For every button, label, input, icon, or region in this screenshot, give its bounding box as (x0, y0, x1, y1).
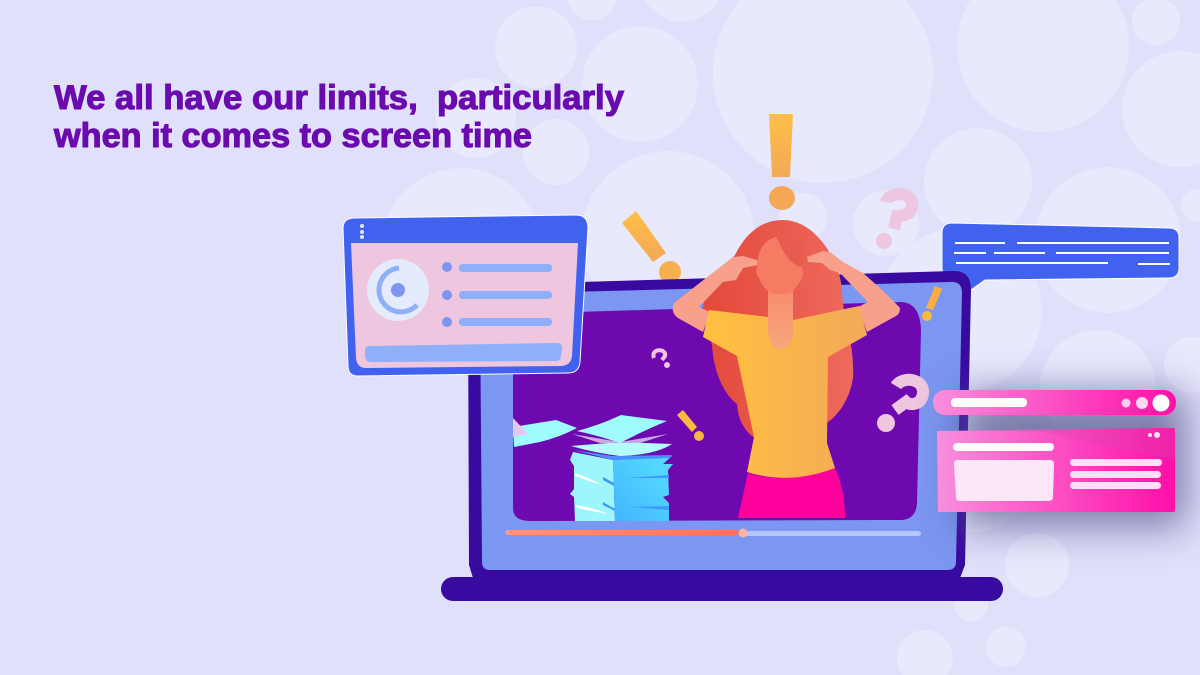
laptop base (441, 577, 1003, 601)
progress bar (505, 528, 921, 538)
title (53, 79, 624, 155)
video area (513, 302, 921, 521)
right arm (807, 251, 900, 332)
panel: dashboard window (343, 215, 588, 376)
flying sheet (513, 418, 577, 447)
small exclamation mark (677, 410, 704, 441)
woman (673, 220, 900, 518)
paper stack (513, 415, 673, 521)
list rows (442, 262, 552, 327)
laptop lid (468, 271, 971, 578)
window frame (343, 215, 588, 376)
icon: small exclamation on bezel (922, 286, 942, 321)
shirt (703, 306, 867, 478)
hair strand (776, 234, 804, 267)
title: We all have our limits, particularly (54, 79, 624, 117)
stack right face (613, 456, 673, 521)
small question mark (653, 350, 670, 368)
panel: pink title bar (933, 390, 1176, 415)
speech bubble (942, 223, 1179, 292)
donut chart (367, 259, 429, 321)
stack top edge (573, 450, 672, 460)
title: when it comes to screen time (53, 117, 532, 155)
lower sheet (571, 442, 672, 456)
middle sheet (572, 434, 668, 443)
hair (703, 220, 853, 438)
background bubbles (381, 0, 1200, 675)
neck (768, 285, 793, 349)
icon: large exclamation mark (769, 114, 795, 210)
shadow behind pink panels (958, 392, 1186, 527)
icon: pink question mark (876, 194, 912, 249)
top sheet (577, 415, 667, 443)
window button (365, 343, 562, 362)
icon: question mark by video edge (877, 380, 923, 432)
laptop screen bezel (480, 282, 962, 570)
laptop (441, 271, 1003, 601)
window menu dots (360, 224, 364, 239)
left arm (673, 256, 758, 332)
icon: tilted exclamation mark (622, 211, 681, 283)
stack left face (570, 452, 615, 521)
window body (351, 243, 578, 368)
face (756, 237, 803, 294)
skirt (738, 468, 845, 518)
panel: pink content card (937, 428, 1175, 512)
